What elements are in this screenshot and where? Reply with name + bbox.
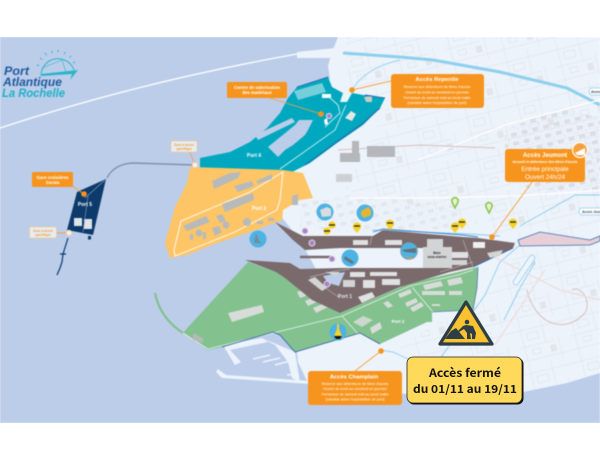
label: port 5: Port 5 [78, 202, 92, 208]
access zone dots [66, 162, 198, 236]
callout: accès champlain: Fermeture du samedi midi au lundi matin [322, 392, 388, 396]
buildings [308, 239, 503, 303]
purple pins [302, 113, 335, 287]
callout: accès repentie: Accès Repentie [415, 77, 459, 83]
badge [572, 142, 588, 158]
label: zone accès spécifique west: spécifique [35, 233, 51, 237]
label: base sous-marine: sous-marine [428, 255, 447, 259]
port 2 [155, 262, 478, 352]
label: gare croisières [32, 172, 73, 187]
grey buildings north [336, 95, 395, 182]
port 4 [200, 77, 385, 173]
callout: accès repentie: Fermeture du samedi midi au lundi matin [404, 96, 470, 100]
port 1 [245, 222, 515, 313]
breakwater [155, 293, 183, 333]
callout: access closed: du 01/11 au 19/11 [413, 381, 517, 397]
city texture [345, 37, 600, 392]
pill labels [516, 88, 600, 282]
label: port 1: Port 1 [338, 294, 352, 300]
logo: Atlantique [2, 75, 62, 89]
inner dock [323, 272, 345, 286]
label: centre de valorisation [227, 82, 287, 98]
callout: accès champlain: Réservé aux détenteurs de titres d'accès [322, 382, 389, 386]
label: zone accès spécifique west [30, 227, 56, 238]
callout: accès champlain: Accès Champlain [330, 374, 379, 380]
label: centre de valorisation: Centre de valorisation [234, 85, 280, 90]
callout: accès champlain [308, 371, 402, 405]
callout: accès jeumont: Accueil et délivrance des titres d'accès [512, 160, 578, 164]
roads [338, 53, 600, 370]
breakwater line [0, 54, 297, 128]
callout: accès repentie: (variable selon l'exploitation du port) [408, 101, 466, 105]
label: port 2: Port 2 [392, 319, 405, 324]
label: gare croisières: Gare croisières [37, 175, 68, 180]
callout: access closed: Accès fermé [428, 365, 501, 381]
marina [216, 338, 310, 384]
label: zone accès spécifique north [171, 141, 197, 152]
callout: accès jeumont: Entrée principale [521, 166, 569, 173]
callout: accès repentie [391, 74, 484, 108]
buildings [183, 172, 298, 240]
logo text: Port [4, 64, 30, 78]
green pins [452, 198, 492, 213]
label: gare croisières: Sorata [46, 180, 60, 185]
harbour basin [268, 120, 313, 157]
callout: accès repentie: Réservé aux détenteurs de titres d'accès [404, 85, 471, 89]
warning sign: road works [440, 302, 492, 344]
callout: accès repentie: Ouvert du lundi au vendredi en journée [405, 90, 469, 94]
land [280, 37, 600, 394]
label: base sous-marine: Base [433, 251, 441, 255]
icon circles [250, 204, 418, 340]
label: port 4: Port 4 [247, 153, 261, 159]
label: zone accès spécifique north: Zone à accès [174, 143, 194, 147]
label: centre de valorisation: des matériaux [242, 90, 272, 95]
label: zone accès spécifique north: spécifique [176, 147, 192, 151]
track [174, 172, 283, 256]
orange location dots [81, 87, 495, 354]
port 3 [165, 167, 313, 258]
logo icon [37, 50, 78, 80]
callout: accès champlain: (variable selon l'exploitation du port) [326, 398, 384, 402]
harbour stripe [255, 118, 295, 140]
pier [300, 256, 332, 258]
orange leader lines [57, 81, 532, 371]
callout: accès jeumont: Accès Jeumont [523, 153, 567, 159]
label: port 3: Port 3 [252, 206, 266, 212]
callout: accès jeumont: Ouvert 24h/24 [525, 174, 565, 181]
callout: accès champlain: Ouvert du lundi au vendredi en journée [323, 387, 387, 391]
logo: La Rochelle [2, 86, 65, 100]
logo [2, 50, 78, 100]
buildings [193, 277, 463, 343]
dense district [505, 108, 600, 190]
callout: accès jeumont [505, 149, 585, 182]
inner quarter [300, 199, 458, 230]
worker icon [445, 320, 476, 339]
callout: access closed [407, 357, 524, 404]
yellow bus pins [323, 219, 517, 235]
port 5 [57, 163, 195, 275]
label: zone accès spécifique west: Zone à accès [33, 229, 53, 233]
